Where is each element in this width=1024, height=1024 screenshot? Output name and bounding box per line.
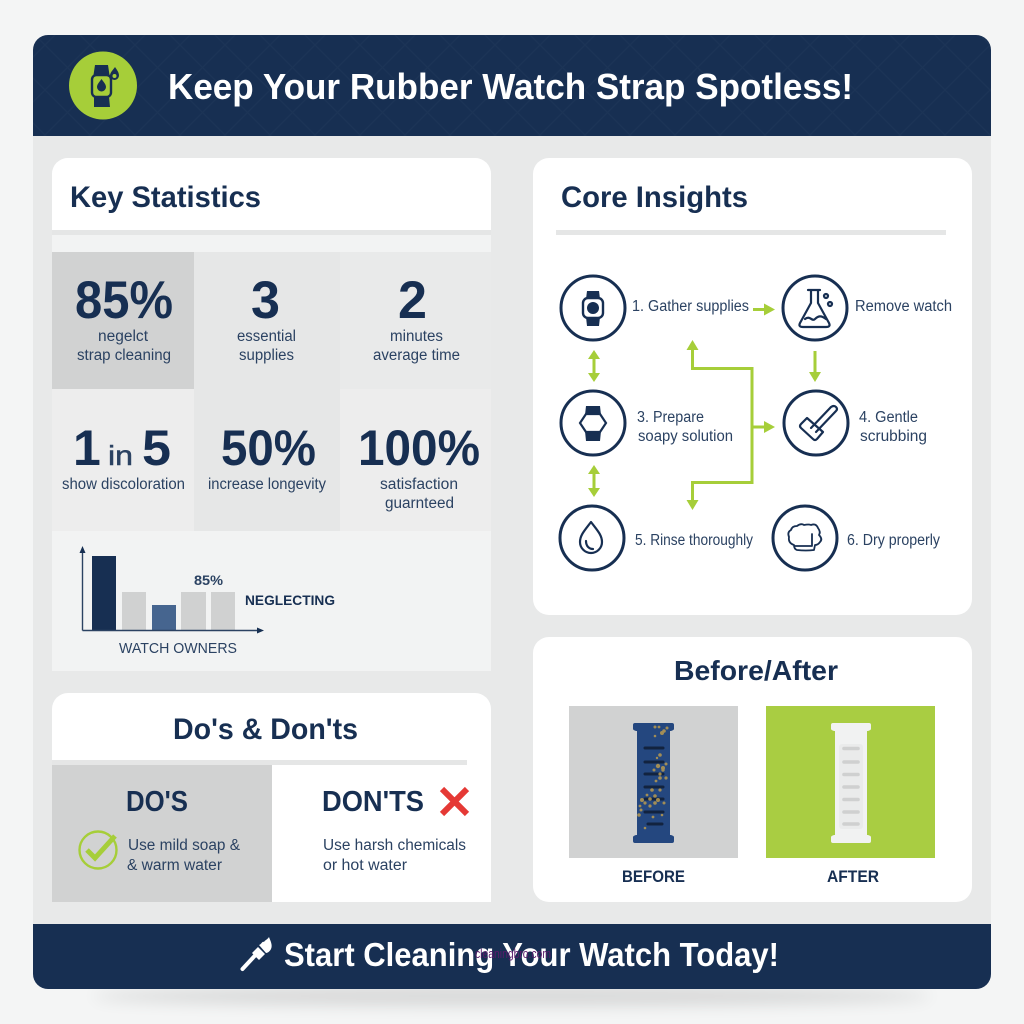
label: after: AFTER (827, 868, 879, 886)
image: clean strap after (766, 706, 935, 858)
stat: 3 essential supplies: supplies (239, 347, 294, 364)
stat: 2 minutes: 2 (398, 271, 427, 330)
step 4: gentle scrubbing: scrubbing (860, 428, 927, 445)
icon: red cross (442, 789, 467, 814)
label: before: BEFORE (622, 868, 685, 886)
column: don'ts (322, 786, 467, 874)
step 1: gather supplies: 1. Gather supplies (632, 298, 749, 315)
step 3: prepare soapy solution: 3. Prepare (637, 409, 704, 426)
heading: do's and don'ts: Do's & Don'ts (173, 713, 358, 746)
arrow: step 1 to step 3 (588, 350, 600, 382)
stat: 100% satisfaction: satisfaction (380, 476, 458, 493)
step 3: prepare soapy solution (561, 391, 733, 455)
panel: before and after (533, 637, 972, 902)
step 5: rinse thoroughly (560, 506, 753, 570)
column: do's: & warm water (127, 857, 222, 874)
stat: 3 essential supplies: 3 (251, 271, 280, 330)
stat: 85% neglect: negelct (98, 328, 149, 345)
stat: 100% satisfaction (340, 389, 491, 531)
step 6: dry properly (773, 506, 940, 570)
footer banner (33, 924, 991, 989)
heading: before/after: Before/After (674, 655, 838, 686)
step 5: rinse thoroughly: 5. Rinse thoroughly (635, 532, 753, 549)
watermark: cleaningbro.com (475, 947, 551, 961)
bar chart: watch owners neglecting: 85% (194, 572, 224, 588)
stat: 100% satisfaction: 100% (358, 420, 480, 476)
arrow: step 3 to step 5 (588, 465, 600, 497)
step 6: dry properly: 6. Dry properly (847, 532, 940, 549)
arrow: branching connector (686, 340, 775, 510)
step 4: gentle scrubbing (784, 391, 927, 455)
stat: 50% longevity: increase longevity (208, 476, 326, 493)
column: don'ts: Use harsh chemicals (323, 837, 466, 854)
panel: do's and don'ts (52, 693, 491, 902)
step 2: remove watch: Remove watch (855, 298, 952, 315)
column: don'ts: or hot water (323, 857, 407, 874)
bar chart: watch owners neglecting: WATCH OWNERS (119, 640, 237, 657)
step 4: gentle scrubbing: 4. Gentle (859, 409, 918, 426)
stat: 50% longevity (194, 389, 340, 531)
call to action: Start Cleaning Your Watch Today! (284, 936, 779, 973)
stat: 2 minutes: minutes (390, 328, 443, 345)
arrow: supplies to remove watch (753, 304, 775, 316)
heading: core insights: Core Insights (561, 181, 748, 214)
stat: 85% neglect (52, 252, 194, 389)
step 2: remove watch (783, 276, 952, 340)
stat: 100% satisfaction: guarnteed (385, 495, 454, 512)
panel: core insights (533, 158, 972, 615)
stat: 1 in 5: 1 (73, 420, 101, 476)
column: do's: Use mild soap & (128, 837, 241, 854)
stat: 2 minutes (340, 252, 491, 389)
bar chart: watch owners neglecting: NEGLECTING (245, 592, 335, 608)
title: Keep Your Rubber Watch Strap Spotless! (168, 66, 853, 107)
stat: 1 in 5: show discoloration (62, 476, 185, 493)
arrow: remove watch to scrubbing (809, 351, 821, 382)
stat: 3 essential supplies (194, 252, 340, 389)
image: dirty strap before (569, 706, 738, 858)
icon: brush (242, 937, 272, 969)
step 1: gather supplies (561, 276, 749, 340)
column: do's (52, 765, 272, 902)
stat: 85% neglect: 85% (75, 271, 173, 330)
column: do's: DO'S (126, 786, 188, 818)
column: don'ts: DON'TS (322, 786, 424, 818)
icon: check mark (80, 832, 116, 868)
header banner (33, 35, 991, 136)
stat: 2 minutes: average time (373, 347, 460, 364)
stat: 1 in 5 (52, 389, 194, 531)
stat: 85% neglect: strap cleaning (77, 347, 171, 364)
panel: key statistics (52, 158, 491, 671)
stat: 1 in 5: in (108, 440, 133, 471)
stat: 50% longevity: 50% (221, 420, 316, 476)
icon: watch with water drop (69, 52, 137, 120)
stat: 3 essential supplies: essential (237, 328, 296, 345)
stat: 1 in 5: 5 (142, 420, 171, 476)
bar chart: watch owners neglecting (80, 546, 335, 657)
heading: key statistics: Key Statistics (70, 181, 261, 214)
step 3: prepare soapy solution: soapy solution (638, 428, 733, 445)
